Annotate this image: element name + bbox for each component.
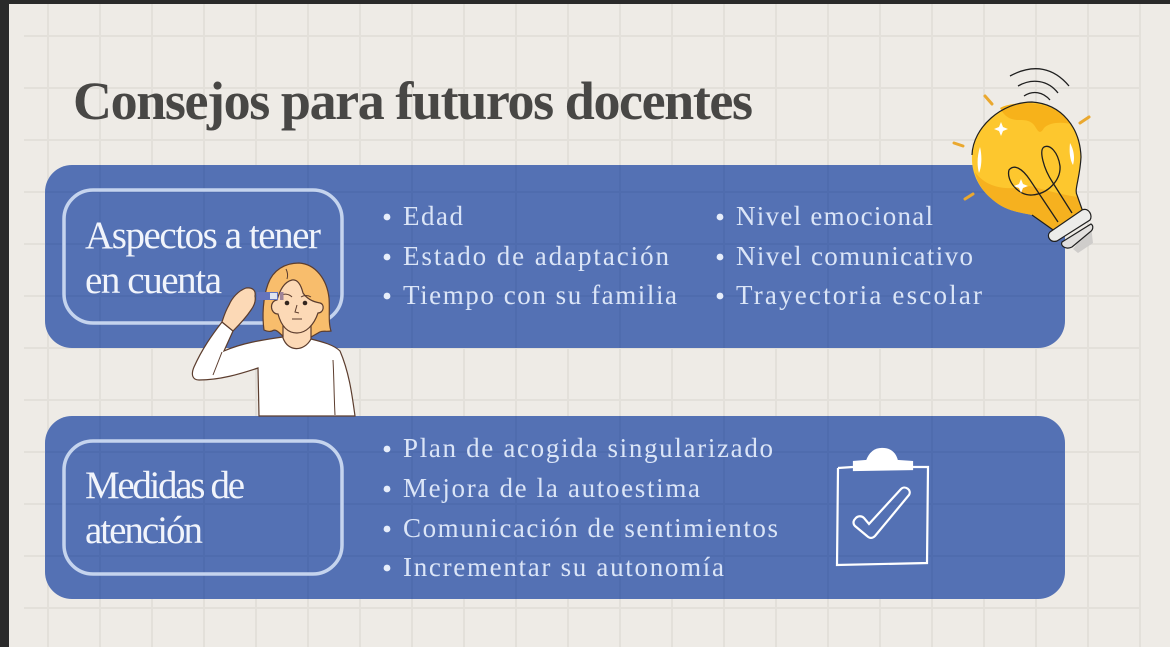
panel: aspectos a tener en cuenta — [45, 165, 1065, 348]
label box: medidas: atención — [85, 509, 203, 552]
neck and face — [283, 326, 311, 349]
list: right column: Nivel comunicativo — [736, 241, 973, 271]
icon: clipboard with check — [837, 449, 928, 565]
list: left column: Tiempo con su familia — [403, 280, 677, 310]
label box: medidas: Medidas de — [85, 464, 245, 507]
signal arcs — [1010, 69, 1069, 100]
label box: medidas — [64, 441, 342, 574]
list: measures: Incrementar su autonomía — [403, 552, 724, 582]
list: measures: Mejora de la autoestima — [403, 473, 700, 503]
label box: aspectos: Aspectos a tener — [85, 214, 321, 257]
list: left column: Estado de adaptación — [403, 241, 670, 271]
label box: aspectos: en cuenta — [85, 259, 222, 302]
highlights — [978, 143, 1074, 173]
hair — [263, 263, 331, 337]
filament — [1009, 146, 1072, 222]
list: measures: Comunicación de sentimientos — [403, 513, 778, 543]
hand — [222, 288, 255, 331]
body — [192, 322, 355, 416]
bulb socket — [1048, 209, 1091, 241]
list: measures: Plan de acogida singularizado — [403, 433, 773, 463]
title: Consejos para futuros docentes — [73, 71, 753, 131]
icon: woman with usb at her temple — [192, 263, 355, 416]
icon: light bulb — [954, 69, 1093, 253]
list: measures — [384, 433, 778, 582]
base shadow — [1073, 226, 1093, 253]
panel: medidas de atención — [45, 416, 1065, 599]
glow rays — [954, 96, 1089, 199]
list: left column: Edad — [403, 201, 464, 231]
label box: aspectos — [64, 190, 342, 323]
list: left column — [384, 201, 677, 310]
glass — [972, 102, 1083, 232]
list: right column: Trayectoria escolar — [736, 280, 982, 310]
usb — [257, 292, 278, 300]
list: right column: Nivel emocional — [736, 201, 933, 231]
list: right column — [717, 201, 982, 310]
